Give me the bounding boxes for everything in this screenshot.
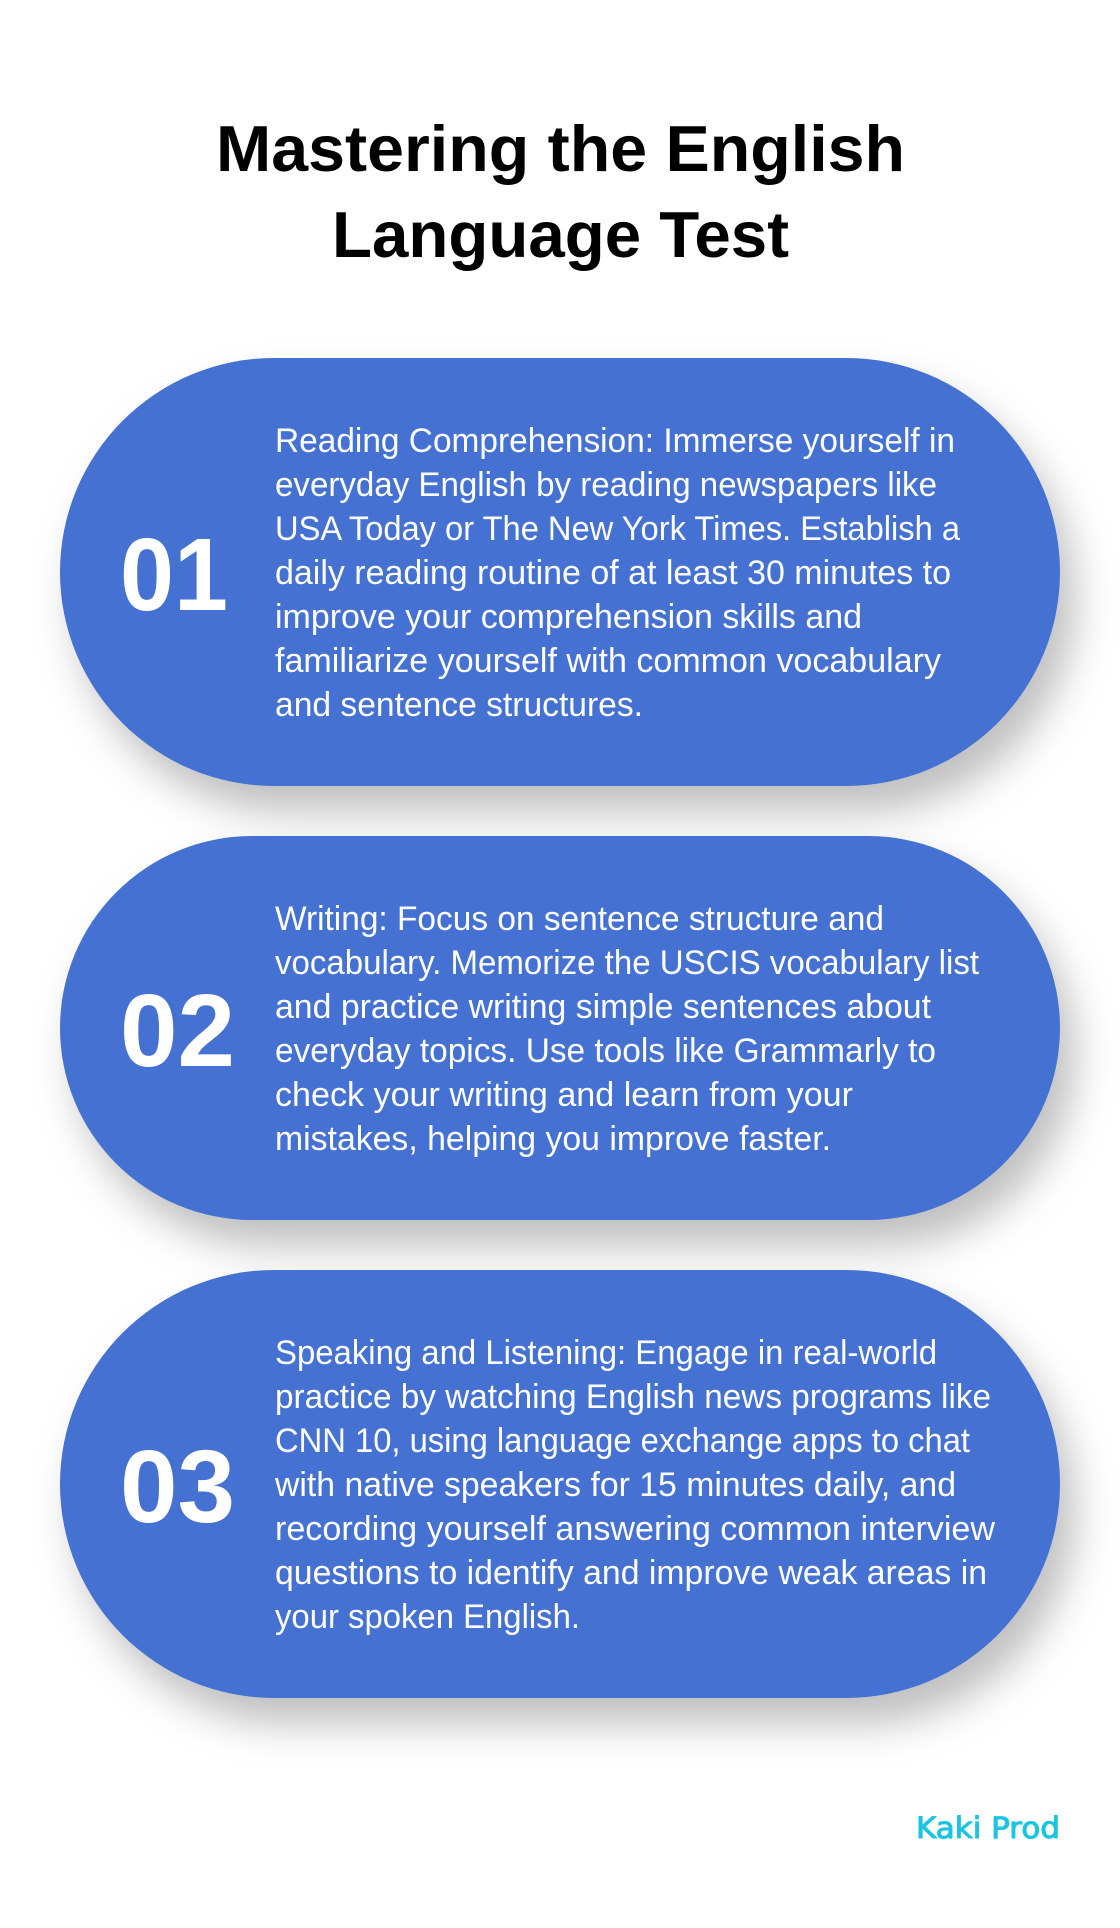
text block 01: and sentence structures. — [275, 686, 643, 724]
title: Mastering the English — [216, 112, 905, 185]
panel: step 02 writing — [60, 836, 1060, 1220]
text block 02: vocabulary. Memorize the USCIS vocabulary list — [275, 944, 979, 982]
title — [216, 112, 905, 271]
pill background 02 — [60, 836, 1060, 1220]
text block 01: everyday English by reading newspapers like — [275, 466, 937, 504]
text block 02: and practice writing simple sentences about — [275, 988, 931, 1026]
text block 03 — [274, 1334, 995, 1636]
text block 03: your spoken English. — [275, 1598, 580, 1636]
text block 01: Reading Comprehension: Immerse yourself in — [275, 422, 955, 460]
text block 01: daily reading routine of at least 30 minutes to — [275, 554, 951, 592]
panel: step 03 speaking and listening — [60, 1270, 1060, 1698]
text block 03: practice by watching English news programs like — [275, 1378, 991, 1416]
panel: step 01 reading comprehension — [60, 358, 1060, 786]
pill background 03 — [60, 1270, 1060, 1698]
text block 03: questions to identify and improve weak areas in — [275, 1554, 987, 1592]
text block 03: CNN 10, using language exchange apps to chat — [275, 1422, 970, 1460]
number 01: 01 — [120, 517, 228, 632]
text block 02: everyday topics. Use tools like Grammarly to — [275, 1032, 936, 1070]
text block 02: Writing: Focus on sentence structure and — [275, 900, 884, 938]
text block 03: Speaking and Listening: Engage in real-world — [275, 1334, 937, 1372]
text block 01: improve your comprehension skills and — [275, 598, 862, 636]
text block 02: check your writing and learn from your — [275, 1076, 853, 1114]
text block 02 — [275, 900, 979, 1158]
number 03: 03 — [120, 1429, 235, 1544]
text block 01: USA Today or The New York Times. Establish a — [275, 510, 961, 548]
text block 01: familiarize yourself with common vocabulary — [275, 642, 942, 680]
text block 03: with native speakers for 15 minutes daily, and — [274, 1466, 956, 1504]
pill background 01 — [60, 358, 1060, 786]
title: Language Test — [332, 198, 789, 271]
text block 03: recording yourself answering common interview — [275, 1510, 995, 1548]
text block 01 — [275, 422, 961, 724]
number 02: 02 — [120, 973, 235, 1088]
text block 02: mistakes, helping you improve faster. — [275, 1120, 831, 1158]
logo: Kaki Prod: Kaki Prod — [916, 1811, 1060, 1845]
